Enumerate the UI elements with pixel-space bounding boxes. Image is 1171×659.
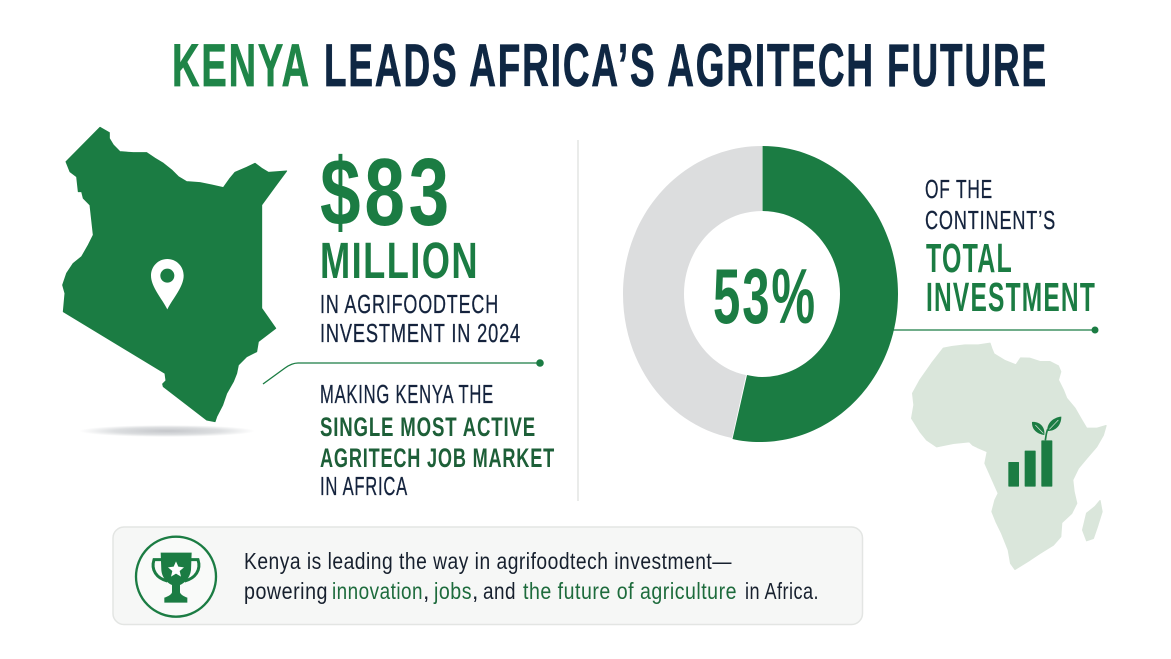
icon: Africa map with growth bars	[912, 343, 1106, 569]
investment description	[320, 289, 521, 348]
Madagascar	[1083, 501, 1102, 541]
donut chart 53%	[623, 146, 898, 442]
icon: trophy	[136, 537, 216, 617]
job market text: SINGLE MOST ACTIVE	[320, 412, 536, 442]
callout text: and	[483, 578, 516, 604]
callout text: jobs	[433, 578, 472, 604]
stat: $83: $83	[320, 139, 453, 246]
icon: location pin	[151, 259, 184, 309]
callout text: Kenya is leading the way in agrifoodtech investment—	[244, 548, 732, 574]
callout text	[244, 548, 819, 604]
continent share text	[925, 174, 1096, 320]
title: KENYA	[172, 32, 311, 99]
map shadow	[79, 425, 255, 437]
investment description: IN AGRIFOODTECH	[320, 289, 499, 319]
job market text: AGRITECH JOB MARKET	[320, 443, 555, 473]
icon: bars with sprout	[1008, 417, 1061, 487]
callout text: in Africa.	[745, 578, 819, 604]
continent share text: OF THE	[925, 174, 993, 204]
callout text: powering	[244, 578, 328, 604]
callout text: ,	[472, 578, 478, 604]
callout text: innovation	[332, 578, 423, 604]
callout text: the future of agriculture	[523, 578, 737, 604]
donut value: 53%	[713, 252, 817, 340]
continent share text: CONTINENT’S	[925, 205, 1056, 235]
callout text: ,	[423, 578, 429, 604]
investment description: INVESTMENT IN 2024	[320, 318, 521, 348]
job market text	[320, 379, 555, 501]
connector line right	[893, 326, 1098, 334]
job market text: IN AFRICA	[320, 471, 408, 501]
connector line	[263, 359, 544, 384]
callout card	[113, 527, 862, 624]
continent share text: TOTAL	[926, 235, 1013, 281]
job market text: MAKING KENYA THE	[320, 379, 494, 409]
stat: million: MILLION	[320, 232, 479, 289]
icon: Kenya map with pin	[63, 127, 287, 422]
